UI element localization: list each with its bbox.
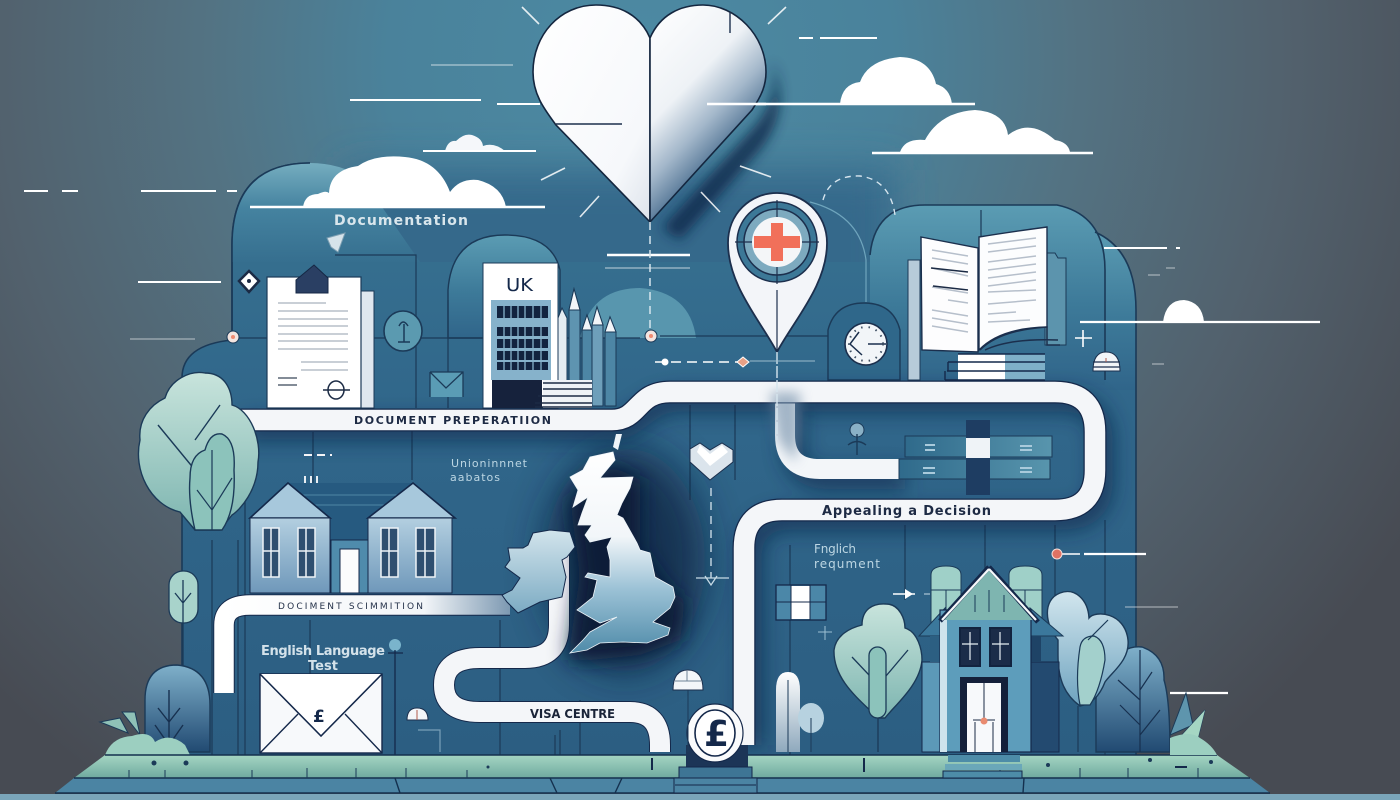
panel: blended top of building	[345, 170, 895, 345]
bottom strip	[0, 794, 1400, 800]
grid window	[776, 585, 832, 640]
teal hill	[580, 288, 696, 338]
road: visa centre	[444, 555, 660, 752]
dashed pin line	[776, 352, 778, 440]
cloud: far right	[1080, 300, 1320, 322]
label: english language test	[261, 644, 385, 674]
lamp post	[388, 639, 403, 755]
dashed connector	[649, 222, 651, 330]
wings	[922, 662, 942, 752]
map pin	[728, 193, 827, 352]
cloud: right	[872, 110, 1093, 153]
left house	[250, 476, 455, 593]
label: english language test: English Language	[261, 644, 385, 659]
icon: small plant	[848, 423, 866, 455]
annotation: union: Unioninnnet	[451, 457, 528, 470]
label: document submission: DOCIMENT SCIMMITION	[278, 602, 423, 612]
pound sign: £	[313, 707, 325, 727]
steps	[943, 755, 1022, 778]
dashed connector with diamond	[655, 357, 815, 367]
annotation: english requirement: requment	[814, 557, 880, 571]
door	[340, 549, 359, 593]
dark shadow behind map	[545, 448, 705, 672]
small capsule tree	[169, 571, 198, 755]
coin stack	[535, 380, 592, 408]
road: document preparation	[235, 392, 1095, 745]
towers	[931, 566, 961, 625]
centre roof	[288, 483, 415, 540]
coin with stairs	[674, 704, 757, 793]
small plus and arch right	[1075, 330, 1120, 371]
right arch	[870, 205, 1105, 385]
pound sign: £	[704, 714, 729, 755]
road: document submission	[224, 602, 510, 693]
tall tree left	[145, 665, 210, 752]
annotation: english requirement: Fnglich	[814, 542, 856, 556]
house right	[919, 566, 1063, 778]
icon: small heart	[690, 443, 733, 480]
icon: badge circle	[384, 311, 422, 351]
nodes	[227, 330, 657, 343]
cloud: documentation	[250, 156, 545, 207]
document: UK sheet	[483, 263, 592, 408]
facade	[940, 610, 1031, 752]
right outer arch	[1090, 230, 1136, 390]
annotation: aabatos: aabatos	[450, 471, 500, 484]
small arch with window	[407, 708, 440, 752]
northern isles	[613, 434, 622, 450]
label: visa centre: VISA CENTRE	[530, 707, 615, 721]
pin arch	[810, 202, 866, 302]
roofs	[250, 483, 330, 518]
cloud: top right	[705, 57, 975, 104]
road shadow	[245, 402, 1103, 745]
icon: diamond	[239, 271, 259, 292]
heart shadow	[662, 60, 780, 240]
small lamp marker	[673, 670, 703, 752]
documents: clipboard	[267, 265, 374, 408]
tree blue right front	[1047, 592, 1128, 752]
label: document preparation: DOCUMENT PREPERATIION	[354, 414, 551, 427]
Great Britain	[570, 452, 675, 653]
tree mint right	[834, 604, 922, 752]
heart horizontal line	[707, 103, 766, 105]
label: english language test: Test	[308, 659, 338, 674]
book stack	[945, 354, 1045, 380]
annotation: english requirement	[814, 542, 880, 571]
book	[908, 227, 1066, 380]
dashed arc	[823, 176, 895, 215]
big tree left	[138, 372, 259, 530]
sky lines	[24, 7, 1228, 693]
bush left	[100, 712, 190, 755]
road: branch	[785, 395, 905, 469]
UK arch	[448, 235, 560, 338]
left arch	[232, 163, 420, 262]
icon: clock	[845, 323, 887, 365]
icon: shield	[327, 233, 345, 252]
side roofs	[919, 608, 1063, 636]
map shadow	[568, 465, 685, 660]
panel: building silhouette	[182, 163, 1136, 760]
envelope	[260, 674, 382, 753]
tree blue right back	[1096, 647, 1170, 752]
clock arch	[828, 303, 900, 380]
pencils	[558, 289, 616, 406]
books row	[899, 420, 1052, 495]
windows	[960, 628, 1011, 666]
map: UK and Ireland	[502, 434, 675, 653]
gable	[940, 567, 1038, 620]
label: appealing a decision: Appealing a Decision	[822, 504, 991, 519]
bush right	[1170, 693, 1217, 755]
cloud: small top	[423, 135, 536, 151]
walls	[250, 518, 330, 593]
Ireland	[502, 530, 575, 613]
chimney marks	[305, 476, 317, 483]
road shading	[770, 392, 800, 462]
door	[960, 677, 1008, 752]
label: UK: UK	[506, 275, 534, 296]
icon: small envelope	[430, 372, 463, 397]
ground	[55, 755, 1270, 793]
structural lines	[212, 210, 1105, 755]
heart	[533, 5, 766, 222]
clip	[296, 265, 328, 293]
icon: medical cross	[754, 223, 800, 261]
label: documentation: Documentation	[334, 213, 468, 229]
small trees near coin	[776, 672, 824, 752]
windows	[263, 528, 435, 577]
dashed arrow	[696, 488, 729, 585]
dashed connector right	[893, 549, 1062, 599]
